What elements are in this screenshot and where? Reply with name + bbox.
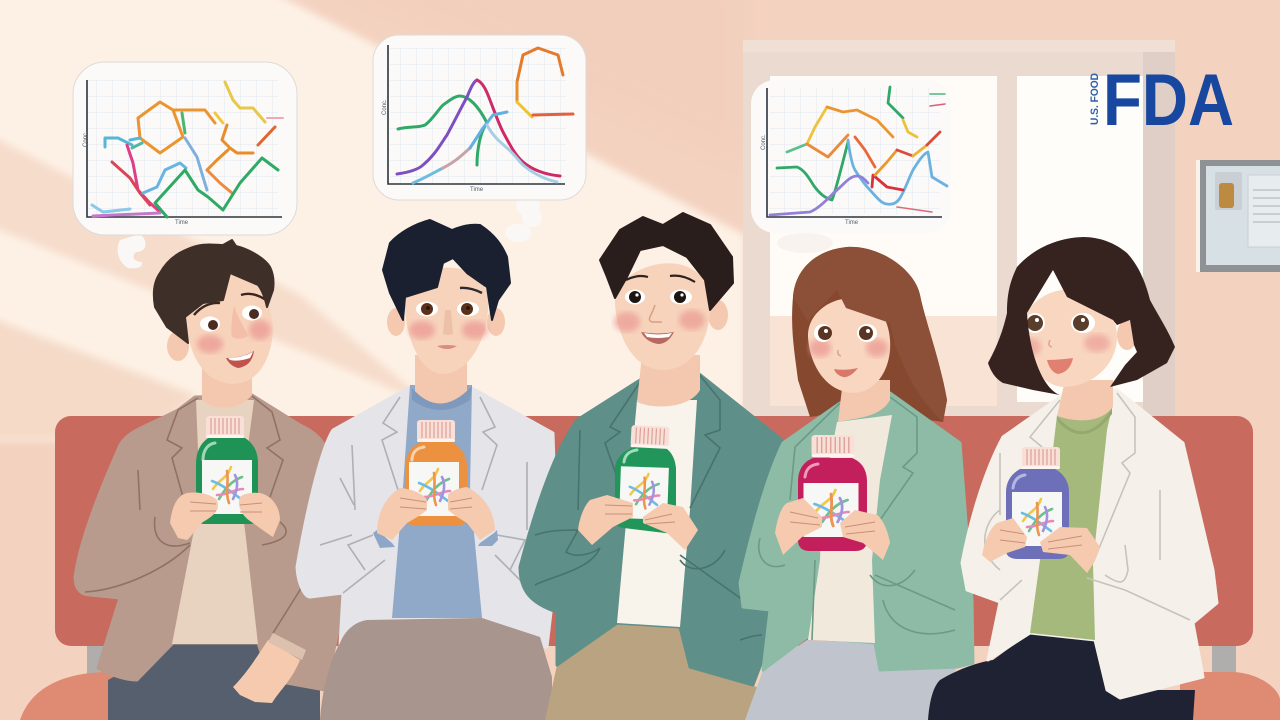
- hands 3: [578, 495, 698, 550]
- axis labels 2: Conc.: [382, 99, 388, 115]
- axis labels 1: [83, 131, 189, 226]
- coat 5: [962, 390, 1217, 698]
- chart axes 2: [388, 45, 565, 184]
- person 1: brown jacket: [75, 240, 345, 720]
- coat 2: [297, 387, 557, 647]
- chart axes 3: [767, 88, 942, 217]
- FDA logo: [1089, 60, 1234, 141]
- thought bubble 3: [751, 80, 951, 253]
- axis labels 2: [382, 99, 484, 193]
- shirt 3: [617, 400, 697, 627]
- person 2: white coat, blue shirt: [297, 220, 557, 720]
- front hair 4: [793, 247, 947, 422]
- hands 5: [982, 518, 1100, 573]
- neck and face 5: [1019, 289, 1137, 434]
- back hair 4: [792, 247, 947, 422]
- shirt 4: [808, 415, 892, 643]
- jacket 3: [520, 373, 790, 685]
- hair 3: [600, 213, 733, 310]
- hands 1: [170, 492, 306, 703]
- neck and face 1: [167, 271, 273, 408]
- bubble tail 1: [118, 234, 146, 268]
- bubble tail 3: [777, 233, 833, 253]
- chart lines 2: [397, 48, 573, 183]
- axis labels 1: Time: [175, 220, 189, 226]
- neck and face 4: [808, 298, 890, 422]
- jacket lines 3: [535, 373, 762, 640]
- hands 2: [373, 487, 498, 548]
- framed notice on wall: [1196, 160, 1280, 272]
- jacket 1: [75, 395, 345, 690]
- chart lines 3: [770, 87, 947, 215]
- hands 4: [775, 498, 890, 560]
- axis labels 3: Conc.: [761, 134, 767, 150]
- bottle 3: green: [615, 425, 676, 533]
- bottle 2: orange: [405, 420, 467, 526]
- bubble body 1: [73, 62, 297, 235]
- neck and face 3: [614, 263, 728, 406]
- axis labels 3: Time: [845, 220, 859, 226]
- bubble body 2: [373, 35, 586, 200]
- trousers 3: [545, 623, 757, 720]
- shirt 1: [172, 400, 258, 644]
- trousers 2: [320, 618, 552, 720]
- jacket lines 4: [759, 397, 955, 640]
- resting hand 1: [233, 640, 300, 703]
- hair 1: [154, 240, 274, 343]
- window: [743, 40, 1175, 416]
- shirt 5: [1030, 408, 1112, 640]
- sofa: [20, 416, 1280, 720]
- person 4: long auburn hair, green jacket: [740, 247, 973, 720]
- trousers 4: [745, 640, 957, 720]
- shirt 2: [392, 385, 482, 618]
- chart lines 1: [92, 82, 283, 217]
- bottle 5: blue-purple: [1006, 447, 1069, 559]
- hair 5: [988, 237, 1175, 395]
- coat lines 2: [320, 397, 540, 600]
- bubble body 3: [751, 80, 951, 233]
- bottle 4: magenta: [798, 435, 867, 551]
- logo side text: U.S. FOOD: [1089, 73, 1101, 125]
- axis labels 1: Conc.: [83, 131, 89, 147]
- jacket 4: [740, 393, 973, 670]
- axis labels 3: [761, 134, 859, 226]
- hair 2: [383, 220, 510, 320]
- trousers 1: [108, 643, 320, 720]
- chart axes 1: [87, 80, 282, 217]
- thought bubble 1: [73, 62, 297, 268]
- coat lines 5: [985, 393, 1190, 620]
- person 3: teal jacket: [520, 213, 790, 720]
- thought bubble 2: [373, 35, 586, 242]
- person 5: dark bob, white coat: [928, 237, 1217, 720]
- jacket lines 1: [85, 396, 320, 633]
- bottle 1: green: [196, 416, 258, 524]
- axis labels 2: Time: [470, 187, 484, 193]
- logo wordmark: FDA: [1103, 60, 1234, 141]
- bubble tail 2: [505, 196, 542, 242]
- neck and face 2: [387, 268, 505, 410]
- trousers 5: [928, 633, 1195, 720]
